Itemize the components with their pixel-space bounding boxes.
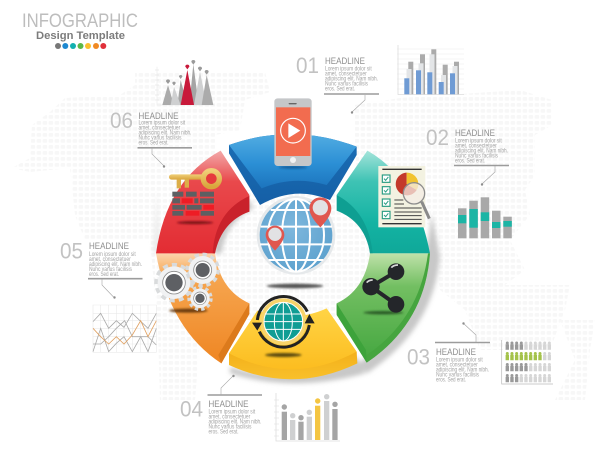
text block 02: HEADLINE [455,128,495,138]
title: Design Template [36,30,125,42]
gear small [189,287,211,309]
chart 04: lollipop bars [274,393,340,441]
text block 01: amet, consectetuer [325,72,367,78]
text block 01: HEADLINE [325,56,365,66]
text block 05: amet, consectetuer [89,257,131,263]
text block 01: eros. Sed erat. [325,86,355,92]
text block 02: 02 [426,125,449,150]
icon: key and brick wall [169,171,219,224]
chart 06: triangle peaks [155,60,215,105]
segment: yellow [229,308,357,379]
text block 06: adipiscing elit. Nam nibh. [138,130,192,136]
text block 02: amet, consectetuer [455,144,497,150]
text block 05: 05 [60,238,83,264]
text block 03: amet, consectetuer [436,362,478,368]
text block 04: Nunc varius facilisis [208,424,252,430]
text block 06: Nunc varius facilisis [138,136,182,142]
text block 01: adipiscing elit. Nam nibh. [325,76,378,82]
pin large [309,197,331,227]
text block 03: 03 [407,344,430,370]
text block 03: HEADLINE [436,347,476,357]
chart 05: line chart [93,305,156,352]
icon: phone with play button [274,98,312,169]
gear large [156,265,192,300]
text block 02: Lorem ipsum dolor sit [455,138,502,144]
ring drop shadows [153,190,440,383]
text block 02: eros. Sed erat. [455,158,485,164]
text block 03 [407,322,490,384]
icon: document with checklist and magnifier [378,166,429,227]
text block 05 [60,238,142,299]
text block 04: HEADLINE [208,399,249,409]
text block 06: HEADLINE [138,111,179,121]
text block 04: adipiscing elit. Nam nibh. [208,420,262,426]
text block 01: 01 [296,53,319,78]
gear upper [187,255,218,285]
text block 01: Nunc varius facilisis [325,82,368,88]
text block 02: adipiscing elit. Nam nibh. [455,148,508,154]
text block 05: Lorem ipsum dolor sit [89,252,136,258]
segment: red [156,151,249,253]
text block 05: adipiscing elit. Nam nibh. [89,262,142,268]
circular ring diagram [153,98,440,383]
text block 05: eros. Sed erat. [89,272,119,278]
chart 01: grouped bars [397,45,464,94]
text block 01 [296,53,379,114]
chart 02: stacked bars [458,197,512,238]
icon: share symbol [362,263,404,314]
pin small [266,226,284,251]
text block 04: amet, consectetuer [208,414,250,420]
segment: blue [229,134,357,205]
text block 05: Nunc varius facilisis [89,267,132,273]
text block 03: Lorem ipsum dolor sit [436,358,483,364]
text block 03: Nunc varius facilisis [436,372,479,378]
text block 04: 04 [180,396,203,422]
text block 06: Lorem ipsum dolor sit [138,120,185,126]
text block 06: 06 [110,108,133,133]
text block 03: adipiscing elit. Nam nibh. [436,368,489,374]
text block 04 [180,375,262,436]
text block 01: Lorem ipsum dolor sit [325,66,372,72]
text block 03: eros. Sed erat. [436,378,466,384]
icon: rotating globe [252,297,315,357]
text block 06: amet, consectetuer [138,126,180,132]
icon: three gears [156,255,218,313]
text block 02 [426,125,509,186]
text block 04: Lorem ipsum dolor sit [208,410,255,416]
central globe with location pins [257,196,335,288]
text block 06: eros. Sed erat. [138,140,169,146]
chart 03: people pictogram [502,340,553,384]
title: INFOGRAPHIC [22,10,138,32]
title [22,10,138,49]
text block 02: Nunc varius facilisis [455,154,498,160]
segment: teal [337,151,430,253]
text block 06 [110,108,192,168]
segment: green [337,253,430,363]
text block 04: eros. Sed erat. [208,430,239,436]
text block 05: HEADLINE [89,241,129,251]
segment: orange [156,253,249,363]
